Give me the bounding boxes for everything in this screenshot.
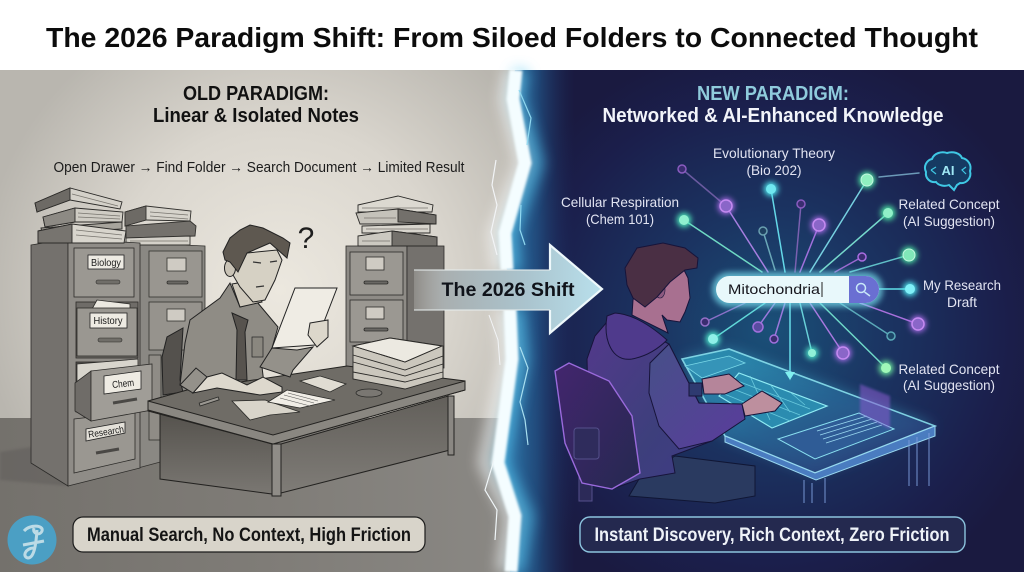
arrow: the 2026 shift: The 2026 Shift — [442, 280, 575, 301]
old paradigm summary chip — [73, 517, 425, 552]
old workflow steps: Open Drawer → Find Folder → Search Document → Limited Result — [54, 160, 464, 176]
lightning divider — [484, 70, 536, 572]
network labels: (AI Suggestion) — [903, 213, 995, 229]
student torso — [180, 283, 278, 393]
search bar — [712, 272, 883, 307]
old paradigm heading — [153, 83, 359, 127]
knowledge nodes — [677, 165, 926, 375]
student with hoodie — [587, 243, 782, 489]
drawer label: Research — [86, 422, 125, 453]
icon: AI brain: AI — [942, 163, 954, 178]
new paradigm heading: Networked & AI-Enhanced Knowledge — [602, 105, 944, 127]
drawer label: History: History — [94, 316, 122, 327]
binder stack three — [356, 196, 437, 246]
drawer label: History — [90, 313, 127, 342]
network labels — [561, 145, 1001, 393]
network labels: (Bio 202) — [746, 162, 802, 178]
network labels: Related Concept — [898, 361, 1000, 377]
neck and face — [632, 268, 690, 333]
new paradigm summary chip — [580, 517, 965, 552]
drawer label: Chem — [104, 371, 141, 403]
binder stack two — [125, 206, 196, 245]
paper stack on desk — [353, 338, 443, 389]
new paradigm heading: NEW PARADIGM: — [697, 83, 849, 105]
chair — [555, 363, 640, 501]
arrow: the 2026 shift — [414, 245, 602, 333]
network labels: My Research — [923, 277, 1001, 293]
drawer label: Chem: Chem — [112, 378, 135, 391]
network labels: (Chem 101) — [586, 211, 654, 227]
old paradigm heading: Linear & Isolated Notes — [153, 105, 359, 127]
hoodie torso — [587, 316, 712, 489]
new paradigm summary chip: Instant Discovery, Rich Context, Zero Friction — [594, 525, 950, 546]
lower hand — [742, 391, 782, 416]
ear — [655, 282, 665, 298]
panel: new paradigm — [490, 70, 1024, 572]
logo badge — [8, 516, 56, 564]
ear — [224, 260, 236, 276]
network labels: Cellular Respiration — [561, 194, 679, 210]
holographic desk — [682, 349, 935, 503]
upper wrist — [689, 383, 702, 396]
shirt — [180, 283, 278, 393]
knowledge network lines — [682, 169, 919, 380]
new paradigm heading — [602, 83, 944, 127]
desk — [148, 366, 465, 496]
search bar: Mitochondria — [728, 281, 820, 297]
question mark: ? — [298, 222, 314, 255]
network labels: Draft — [947, 294, 977, 310]
right forearm — [260, 347, 313, 377]
filing cabinet two — [138, 243, 205, 468]
old paradigm summary chip: Manual Search, No Context, High Friction — [87, 525, 411, 546]
sleeve — [649, 344, 745, 449]
upper hand — [702, 374, 744, 394]
night background — [490, 70, 1024, 572]
hood fold — [606, 313, 667, 359]
network labels: Evolutionary Theory — [713, 145, 835, 161]
worried student — [180, 225, 313, 395]
wall and floor — [0, 70, 530, 572]
network labels: Related Concept — [898, 196, 1000, 212]
drawer label: Biology: Biology — [91, 258, 121, 269]
filing cabinet one — [31, 239, 152, 486]
necktie — [232, 313, 248, 380]
drawer label: Research: Research — [87, 424, 125, 441]
shirt pocket — [252, 337, 263, 357]
network labels: (AI Suggestion) — [903, 377, 995, 393]
hair — [223, 225, 290, 272]
icon: AI brain — [925, 152, 971, 190]
eye brows and mouth — [253, 261, 277, 287]
panel: old paradigm — [0, 70, 530, 572]
left forearm on desk — [193, 373, 282, 395]
binder stack one — [35, 188, 126, 243]
desk papers — [199, 376, 382, 420]
left sleeve cuff — [180, 368, 207, 393]
title: The 2026 Paradigm Shift: From Siloed Folders to Connected Thought — [46, 22, 978, 53]
face — [230, 250, 282, 302]
office chair — [162, 328, 183, 395]
neck — [232, 280, 262, 307]
hair — [625, 243, 698, 307]
legs — [629, 456, 755, 503]
old paradigm heading: OLD PARADIGM: — [183, 83, 329, 105]
filing cabinet three — [346, 246, 444, 368]
held document — [272, 288, 337, 348]
drawer label: Biology — [88, 255, 124, 284]
